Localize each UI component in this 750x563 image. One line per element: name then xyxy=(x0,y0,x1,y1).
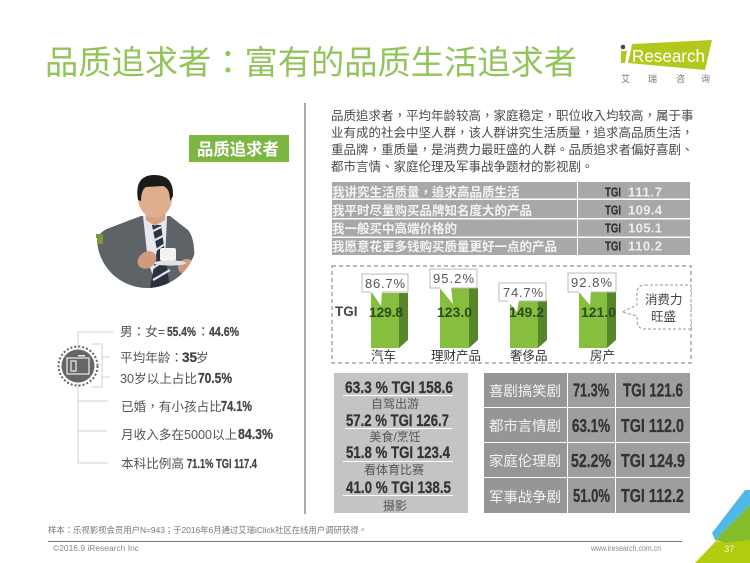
table: favourite drama genres: 52.2% xyxy=(571,451,611,471)
logo: iResearch: Research xyxy=(632,46,705,66)
panel: interests: 41.0 % TGI 138.5 xyxy=(346,478,451,497)
bar: financial products: 理财产品 xyxy=(431,349,481,363)
callout: strong purchasing power: 消费力 xyxy=(645,293,683,307)
table: attitude statements with TGI: TGI xyxy=(605,202,621,218)
logo: iResearch: 咨 xyxy=(676,73,685,84)
table: favourite drama genres: 军事战争剧 xyxy=(489,488,561,506)
stat: average age: 平均年龄： xyxy=(120,351,183,365)
stat: average age: 35 xyxy=(182,350,198,365)
chart: TGI bars by category xyxy=(332,266,691,363)
bar: luxury goods: 74.7% xyxy=(503,285,543,300)
table: favourite drama genres: 都市言情剧 xyxy=(489,418,561,435)
axis label TGI: TGI xyxy=(335,304,358,319)
badge: persona name: 品质追求者 xyxy=(197,140,279,159)
description paragraph xyxy=(331,108,694,174)
stat: over 30: 30岁以上占比 xyxy=(120,372,197,386)
callout: strong purchasing power: 旺盛 xyxy=(651,309,676,324)
stat: gender: 男：女= xyxy=(120,324,165,339)
logo: iResearch xyxy=(621,40,712,84)
table: attitude statements with TGI: 110.2 xyxy=(628,238,662,254)
bar: luxury goods: 149.2 xyxy=(509,304,544,320)
stat: education: 本科比例高 xyxy=(121,456,184,471)
stat: income: 月收入多在5000以上 xyxy=(121,428,237,442)
footer rule xyxy=(48,541,682,542)
stat: over 30: 70.5% xyxy=(198,370,232,387)
stat: married xyxy=(121,398,252,415)
table: attitude statements with TGI: 我平时尽量购买品牌知名度大的产品 xyxy=(332,203,532,218)
bar: luxury goods: 奢侈品 xyxy=(510,349,548,363)
panel: interests: 摄影 xyxy=(383,498,407,513)
logo: iResearch: 艾 xyxy=(621,74,630,84)
corner decoration with page number xyxy=(695,490,750,563)
bar: car: 129.8 xyxy=(369,304,403,320)
callout: strong purchasing power xyxy=(622,285,691,329)
logo: iResearch: 瑞 xyxy=(648,73,657,84)
table: attitude statements with TGI: 我一般买中高端价格的 xyxy=(332,221,457,236)
table: attitude statements with TGI: TGI xyxy=(605,238,621,254)
bar: luxury goods xyxy=(499,283,548,363)
description paragraph: 重品牌，重质量，是消费力最旺盛的人群。品质追求者偏好喜剧、 xyxy=(331,142,694,157)
bar: real estate: 92.8% xyxy=(571,275,612,290)
stat: education xyxy=(121,456,258,471)
bar: financial products xyxy=(430,269,481,363)
panel: interests: 美食/烹饪 xyxy=(369,429,421,444)
description paragraph: 业有成的社会中坚人群，该人群讲究生活质量，追求高品质生活， xyxy=(331,125,694,140)
icon: ID card badge xyxy=(58,346,98,386)
stat: average age xyxy=(120,350,209,365)
table: favourite drama genres: 71.3% xyxy=(573,380,609,400)
table: attitude statements with TGI xyxy=(332,182,690,255)
table: attitude statements with TGI: 我愿意花更多钱购买质量更好一点的产品 xyxy=(332,239,557,254)
stat: married: 74.1% xyxy=(221,398,252,415)
stat: income: 84.3% xyxy=(238,426,273,443)
table: attitude statements with TGI: 我讲究生活质量，追求高品质生活 xyxy=(332,184,520,200)
panel: interests: 57.2 % TGI 126.7 xyxy=(346,411,449,430)
corner decoration with page number: 37 xyxy=(724,544,735,555)
description paragraph: 品质追求者，平均年龄较高，家庭稳定，职位收入均较高，属于事 xyxy=(331,108,694,123)
table: favourite drama genres: 喜剧搞笑剧 xyxy=(489,383,561,400)
table: favourite drama genres: TGI 112.2 xyxy=(621,486,684,506)
stat: gender: 55.4% xyxy=(167,324,196,339)
description paragraph: 都市言情、家庭伦理及军事战争题材的影视剧。 xyxy=(331,159,594,174)
bar: car xyxy=(362,274,408,363)
table: attitude statements with TGI: 111.7 xyxy=(628,184,662,200)
logo: iResearch: 询 xyxy=(701,73,710,84)
table: favourite drama genres xyxy=(484,373,690,513)
demographics connector lines xyxy=(78,332,113,463)
bar: real estate: 121.0 xyxy=(581,304,616,320)
bar: financial products: 123.0 xyxy=(437,304,472,320)
badge: persona name xyxy=(189,135,289,162)
table: favourite drama genres: 63.1% xyxy=(572,416,610,436)
stat: education: 71.1% TGI 117.4 xyxy=(187,456,258,471)
bar: car: 86.7% xyxy=(365,276,405,291)
stat: over 30 xyxy=(120,370,232,387)
website: www.iresearch.com.cn xyxy=(590,544,661,553)
vertical divider xyxy=(304,103,306,514)
table: favourite drama genres: TGI 124.9 xyxy=(621,451,685,471)
stat: gender: 44.6% xyxy=(209,324,239,339)
table: attitude statements with TGI: TGI xyxy=(605,220,621,236)
bar: car: 汽车 xyxy=(371,348,396,363)
table: favourite drama genres: 51.0% xyxy=(573,486,610,506)
stat: gender: ： xyxy=(197,325,210,339)
panel: interests: 自驾出游 xyxy=(371,397,419,411)
stat: married: 已婚，有小孩占比 xyxy=(121,400,222,414)
bar: financial products: 95.2% xyxy=(433,271,474,286)
portrait: businessman with coffee cup xyxy=(96,175,197,290)
table: favourite drama genres: 家庭伦理剧 xyxy=(489,453,561,470)
sample note: 样本：乐视影视会员用户N=943；于2016年6月通过艾瑞iClick社区在线用户调研获得。 xyxy=(48,524,367,535)
table: attitude statements with TGI: TGI xyxy=(605,184,621,200)
stat: income xyxy=(121,426,273,443)
table: attitude statements with TGI: 105.1 xyxy=(628,220,662,236)
panel: interests: 看体育比赛 xyxy=(364,462,424,477)
panel: interests: 63.3 % TGI 158.6 xyxy=(345,378,453,397)
copyright: ©2016.9 iResearch Inc xyxy=(53,544,139,553)
panel: interests xyxy=(334,373,468,513)
panel: interests: 51.8 % TGI 123.4 xyxy=(346,443,450,462)
table: attitude statements with TGI: 109.4 xyxy=(628,202,663,218)
table: favourite drama genres: TGI 112.0 xyxy=(621,416,684,436)
bar: real estate xyxy=(568,273,616,363)
bar: real estate: 房产 xyxy=(590,348,615,363)
demographic text list xyxy=(120,324,273,471)
title: 品质追求者：富有的品质生活追求者 xyxy=(45,45,577,82)
stat: average age: 岁 xyxy=(196,351,209,365)
stat: gender xyxy=(120,324,239,339)
table: favourite drama genres: TGI 121.6 xyxy=(623,380,683,400)
